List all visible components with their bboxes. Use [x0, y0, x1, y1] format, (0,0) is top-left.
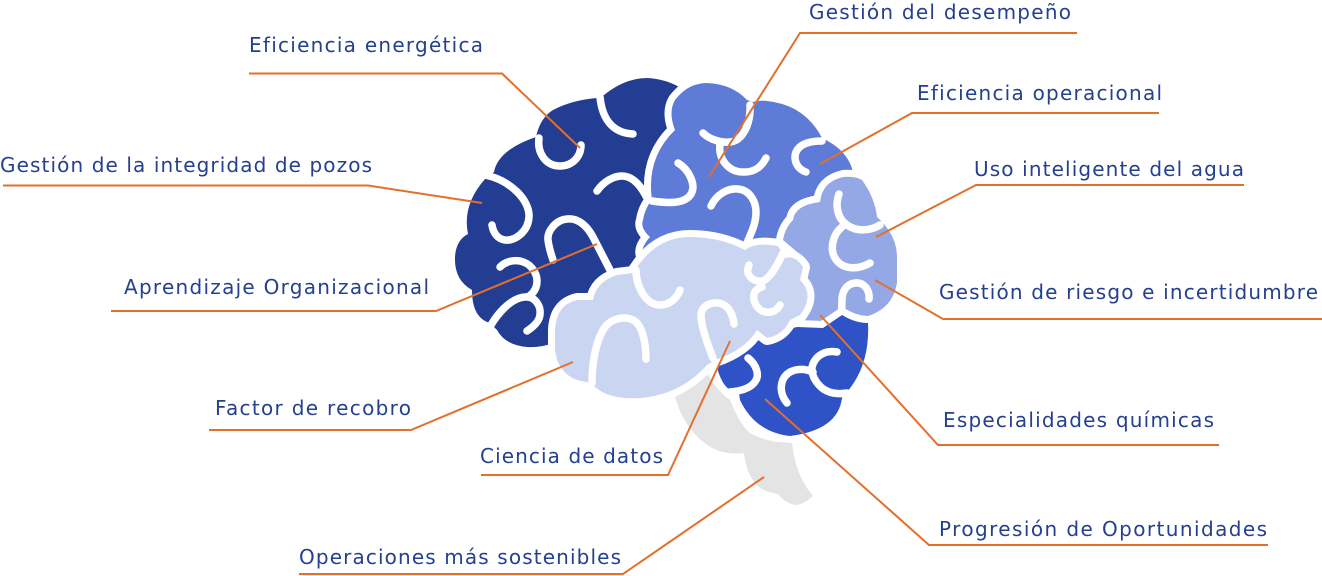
- callout: Gestión del desempeño: Gestión del desempeño: [809, 0, 1071, 24]
- medium lobe folds: [703, 105, 750, 142]
- callout: Uso inteligente del agua: Uso inteligente del agua: [974, 157, 1244, 181]
- callout: Operaciones más sostenibles: Operaciones más sostenibles: [299, 545, 621, 569]
- lobe: bright blue: [716, 315, 868, 436]
- bright lobe folds: [730, 358, 757, 392]
- brain illustration: [455, 78, 897, 505]
- lobe: dark blue: [455, 78, 684, 347]
- periwinkle lobe folds: [837, 194, 880, 230]
- lobe: periwinkle: [783, 177, 897, 325]
- callout: Operaciones más sostenibles: [299, 477, 764, 574]
- callout: Factor de recobro: Factor de recobro: [215, 396, 411, 420]
- brain stem: [675, 373, 813, 505]
- callout: Gestión de la integridad de pozos: Gestión de la integridad de pozos: [0, 153, 372, 177]
- callout: Aprendizaje Organizacional: Aprendizaje Organizacional: [124, 275, 429, 299]
- callout: Aprendizaje Organizacional: [111, 244, 597, 311]
- callout: Gestión del desempeño: [709, 0, 1077, 177]
- callout: Especialidades químicas: Especialidades químicas: [943, 408, 1214, 432]
- callout: Ciencia de datos: Ciencia de datos: [480, 444, 663, 468]
- dark lobe folds: [600, 97, 633, 134]
- lobe: medium blue: [642, 83, 853, 300]
- callout: Progresión de Oportunidades: [765, 399, 1268, 545]
- lobe: pale blue: [555, 237, 808, 398]
- callout: Progresión de Oportunidades: Progresión de Oportunidades: [939, 517, 1267, 541]
- callout: Eficiencia energética: [249, 33, 580, 148]
- callout: Eficiencia operacional: Eficiencia operacional: [917, 81, 1162, 105]
- pale lobe folds: [636, 270, 680, 305]
- callout: Eficiencia operacional: [820, 81, 1162, 164]
- callout: Eficiencia energética: Eficiencia energética: [249, 33, 483, 57]
- callout: Especialidades químicas: [820, 315, 1219, 445]
- callout: Gestión de riesgo e incertidumbre: Gestión de riesgo e incertidumbre: [939, 280, 1318, 304]
- callout: Uso inteligente del agua: [876, 157, 1244, 237]
- callout: Ciencia de datos: [480, 341, 730, 475]
- callout: Gestión de riesgo e incertidumbre: [875, 280, 1322, 319]
- callout: Gestión de la integridad de pozos: [0, 153, 482, 203]
- callout: Factor de recobro: [209, 362, 573, 430]
